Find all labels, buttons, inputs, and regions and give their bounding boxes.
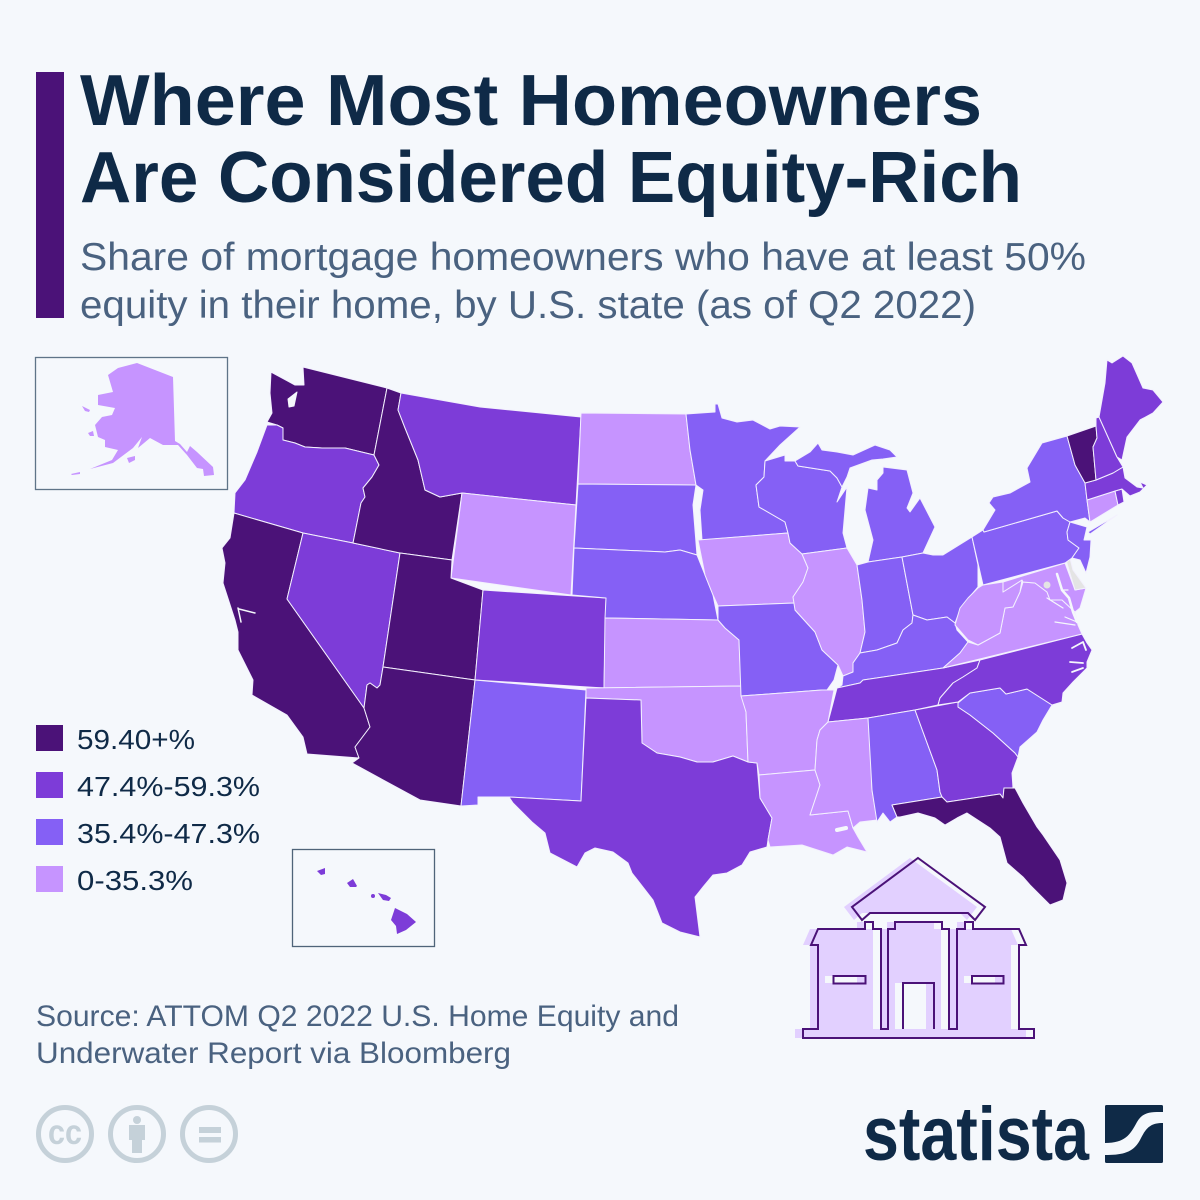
state: Maryland xyxy=(1003,563,1086,612)
state: Vermont xyxy=(1067,426,1097,483)
state: New Hampshire xyxy=(1093,417,1123,480)
state: Long Island, New York xyxy=(1088,515,1117,534)
title xyxy=(80,61,1022,218)
legend item: 35.4%-47.3%: 35.4%-47.3% xyxy=(77,818,260,849)
state: North Carolina xyxy=(938,634,1092,705)
state: South Carolina xyxy=(958,688,1052,757)
state: New Mexico xyxy=(461,680,586,806)
state: Utah xyxy=(383,553,483,680)
legend item: 0-35.3% xyxy=(36,865,193,896)
icon: statista logo xyxy=(1105,1105,1163,1163)
subtitle: Share of mortgage homeowners who have at least 50% xyxy=(80,236,1086,279)
state: Kansas xyxy=(604,618,741,688)
statista wordmark: statista xyxy=(863,1092,1090,1177)
state: Montana xyxy=(398,393,581,505)
state: Michigan lower peninsula xyxy=(865,467,935,562)
legend xyxy=(36,724,260,896)
state: Florida xyxy=(892,788,1067,905)
state: Washington xyxy=(267,367,387,455)
state: Wisconsin xyxy=(756,455,847,554)
state: Minnesota xyxy=(686,404,800,540)
legend item: 59.40+%: 59.40+% xyxy=(77,724,195,755)
source note: Source: ATTOM Q2 2022 U.S. Home Equity and xyxy=(36,1000,679,1033)
state: Louisiana xyxy=(759,770,867,855)
state: New Jersey xyxy=(1067,522,1091,573)
title: Where Most Homeowners xyxy=(80,61,982,141)
state: Delaware xyxy=(1066,558,1086,590)
state: Rhode Island xyxy=(1115,489,1124,505)
state: Mississippi xyxy=(810,718,877,828)
icon: no derivatives xyxy=(182,1108,236,1160)
state: Illinois xyxy=(793,548,865,676)
state: Oregon xyxy=(234,425,379,543)
state: Michigan upper peninsula xyxy=(795,443,897,487)
state: Indiana xyxy=(857,557,913,653)
state: West Virginia xyxy=(955,580,1022,645)
state: Wyoming xyxy=(451,493,576,595)
source note: Underwater Report via Bloomberg xyxy=(36,1037,511,1070)
state: Ohio xyxy=(902,537,978,623)
state: Virginia xyxy=(943,582,1082,668)
icon: creative commons: cc xyxy=(48,1113,82,1152)
subtitle xyxy=(80,236,1086,327)
legend item: 0-35.3%: 0-35.3% xyxy=(77,865,193,896)
state: Connecticut xyxy=(1087,491,1118,522)
icon: attribution xyxy=(110,1108,164,1160)
state: Nevada xyxy=(287,533,400,708)
icon: creative commons xyxy=(38,1108,92,1160)
coastal inlets: Puget Sound, San Francisco Bay, Chesapeake Bay, Pamlico Sound xyxy=(238,392,1086,830)
state: California xyxy=(222,513,370,758)
icon: bank building xyxy=(795,858,1034,1038)
state: Tennessee xyxy=(828,660,980,722)
legend item: 47.4%-59.3%: 47.4%-59.3% xyxy=(77,771,260,802)
title accent bar xyxy=(36,72,64,318)
state: Oklahoma xyxy=(586,686,748,762)
Washington DC xyxy=(1044,582,1050,588)
map: contiguous U.S. states xyxy=(222,356,1163,937)
inset: Hawaii xyxy=(292,850,434,946)
state: Iowa xyxy=(698,533,808,606)
state: New York xyxy=(983,436,1090,532)
state: Massachusetts xyxy=(1085,467,1147,500)
state: Alabama xyxy=(868,710,942,822)
state: South Dakota xyxy=(574,484,697,555)
state: Georgia xyxy=(915,702,1018,802)
state: Colorado xyxy=(475,590,606,688)
state: Maine xyxy=(1099,356,1163,460)
source note xyxy=(36,1000,679,1070)
state: Missouri xyxy=(718,603,838,696)
inset: Alaska xyxy=(36,358,228,490)
state: North Dakota xyxy=(578,413,696,485)
state: Kentucky xyxy=(837,615,968,688)
title: Are Considered Equity-Rich xyxy=(80,138,1022,218)
state: Arizona xyxy=(352,667,475,806)
state: Texas xyxy=(509,698,772,937)
state: Nebraska xyxy=(572,548,718,620)
state: Idaho xyxy=(353,388,462,560)
subtitle: equity in their home, by U.S. state (as of Q2 2022) xyxy=(80,284,976,327)
state: Pennsylvania xyxy=(972,511,1079,585)
state: Arkansas xyxy=(741,690,834,775)
